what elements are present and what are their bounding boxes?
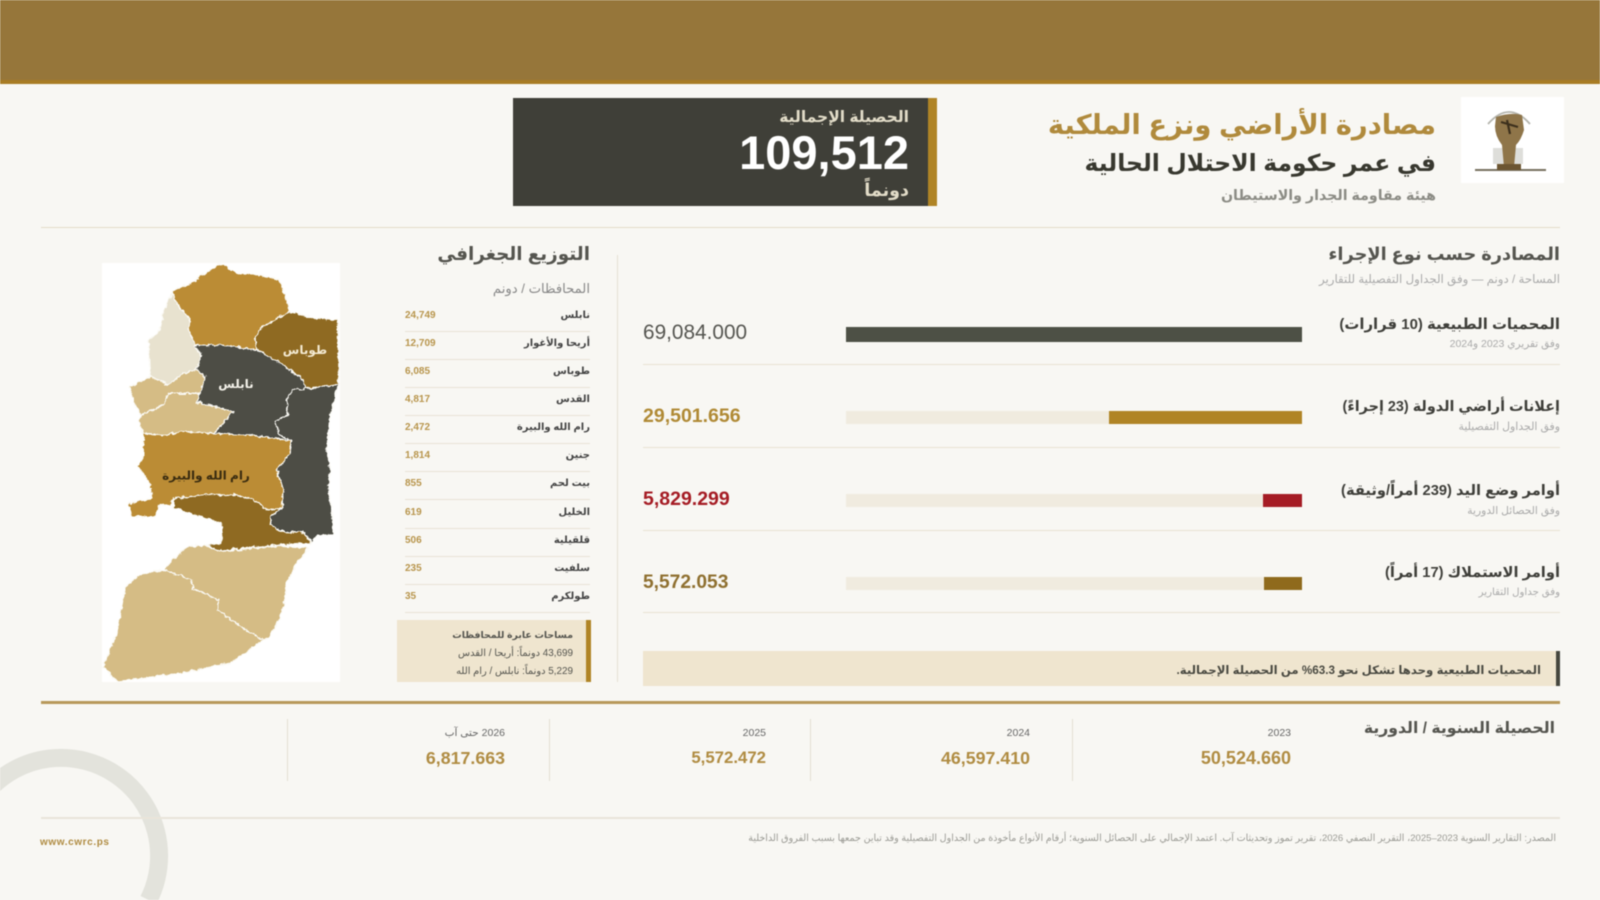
row: Salfit [404,562,590,586]
section divider [617,255,618,682]
website: www.cwrc.ps [40,837,110,848]
callout text: المحميات الطبيعية وحدها تشكل نحو 63.3% من الحصيلة الإجمالية. [1177,664,1541,677]
bar [846,411,1302,424]
logo [1461,97,1564,183]
row: Tubas: طوباس [553,366,590,377]
gold divider [41,701,1560,704]
source: وفق تقريري 2023 و2024 [1450,338,1560,350]
row: Qalqilya: 506 [405,535,422,546]
value: 29,501.656 [643,405,741,427]
callout: natural reserves share [643,651,1560,686]
organization name: هيئة مقاومة الجدار والاستيطان [1221,188,1436,204]
year 2023: 2023 [1268,727,1291,739]
region: Jerusalem [173,495,312,552]
row: Bethlehem: 855 [405,478,422,489]
row: Nablus [404,310,590,332]
row: Ramallah: رام الله والبيرة [517,422,590,433]
total value: 109,512 [739,126,909,179]
row: Nablus: نابلس [561,310,590,321]
title line 2: في عمر حكومة الاحتلال الحالية [1085,150,1436,176]
row: Tulkarm [404,590,590,614]
footer divider [41,817,1560,819]
year 2024: 46,597.410 [941,748,1030,768]
value: 5,572.053 [643,572,728,593]
callout line 1: 43,699 دونماً: أريحا / القدس [458,648,573,659]
panel: geographic distribution [437,243,590,297]
callout line 2: 5,229 دونماً: نابلس / رام الله [456,666,573,677]
row: Tubas: 6,085 [405,366,430,377]
row: Jenin: جنين [566,450,590,461]
row: Jenin: 1,814 [405,450,430,461]
heading: المصادرة حسب نوع الإجراء [1328,244,1560,264]
year 2025: 5,572.472 [691,748,766,767]
row 2 [642,396,1560,433]
region: Bethlehem [163,545,308,640]
row: Hebron: الخليل [559,507,590,518]
bar [846,494,1302,507]
map background [102,263,340,682]
top band [0,0,1600,84]
row: Ramallah [404,422,590,444]
region: Tubas [255,312,338,388]
row: Ramallah: 2,472 [405,422,430,433]
region: Nablus [195,345,306,441]
title line 1: مصادرة الأراضي ونزع الملكية [1048,109,1436,140]
row: Jericho [405,335,590,360]
row: Tulkarm: طولكرم [551,591,590,602]
bar [846,577,1302,590]
region: Ramallah [128,432,292,517]
decorative ring [0,748,168,900]
map label: Nablus: نابلس [218,377,254,391]
callout heading: مساحات عابرة للمحافظات [452,629,573,640]
row: Jericho: أريحا والأغوار [524,338,590,349]
region: Jordan Valley [270,385,338,543]
callout: cross-governorate areas [397,620,591,682]
row: Bethlehem [404,478,590,500]
row: Tubas [404,366,590,388]
year 2026: 2026 حتى آب [445,727,505,739]
region: Hebron [103,569,263,682]
annual heading: الحصيلة السنوية / الدورية [1364,720,1555,737]
map of West Bank [103,264,340,682]
map label: Ramallah: رام الله والبيرة [162,468,250,483]
total panel [513,98,937,206]
row: Qalqilya: قلقيلية [554,535,590,546]
label: أوامر وضع اليد (239 أمراً/وثيقة) [1341,483,1560,499]
row: Salfit: سلفيت [554,563,590,574]
label: المحميات الطبيعية (10 قرارات) [1339,317,1560,333]
map label: Tubas: طوباس [283,343,327,358]
year 2024: 2024 [1007,727,1030,739]
subheading: المساحة / دونم — وفق الجداول التفصيلية للتقارير [1319,272,1560,286]
row 1 [643,316,1560,350]
source: وفق الحصائل الدورية [1467,505,1560,517]
source: وفق الجداول التفصيلية [1458,421,1560,433]
heading: التوزيع الجغرافي [437,243,590,264]
region: Salfit [138,393,233,435]
row: Salfit: 235 [405,563,422,574]
header divider [41,227,1560,228]
year 2026 [426,726,506,768]
region: Qalqilya [129,369,205,415]
value: 69,084.000 [643,321,747,344]
row: Jerusalem: 4,817 [405,394,430,405]
row: Nablus: 24,749 [405,310,436,321]
row 4 [643,561,1560,598]
panel: confiscation by action type [1318,244,1560,286]
row: Qalqilya [404,534,590,558]
row: Bethlehem: بيت لحم [550,478,590,489]
label: إعلانات أراضي الدولة (23 إجراءً) [1343,399,1560,415]
row: Hebron: 619 [405,507,422,518]
source: وفق جداول التقارير [1479,587,1560,598]
governorate list [404,310,590,614]
region: Tulkarm [148,293,202,385]
source note: المصدر: التقارير السنوية 2023–2025، التقرير النصفي 2026، تقرير تموز وتحديثات آب. اعتمد الإجمالي على الحصائل السنوية؛ أرقام الأنواع مأخوذة من الجداول التفصيلية وقد تباين جمعها بسبب الفروق الداخلية [748,833,1556,844]
total unit: دونماً [864,180,909,200]
label: أوامر الاستملاك (17 أمراً) [1385,565,1560,581]
total label: الحصيلة الإجمالية [779,109,909,126]
year 2026: 6,817.663 [426,748,505,768]
year 2023 [1200,727,1292,768]
subheading: المحافظات / دونم [493,281,590,296]
year 2025: 2025 [743,727,766,739]
region: Jenin [172,263,290,350]
bar [846,327,1302,342]
row: Jerusalem [404,394,590,416]
value: 5,829.299 [643,488,730,510]
year 2023: 50,524.660 [1201,748,1291,768]
row: Jericho: 12,709 [405,338,436,349]
row: Tulkarm: 35 [405,591,416,602]
row 3 [643,479,1560,517]
year 2025 [691,727,766,767]
row: Jenin [405,450,590,472]
row: Jerusalem: القدس [556,394,590,405]
row: Hebron [404,506,590,530]
title [1048,107,1436,204]
panel: annual totals [426,720,1555,768]
year 2024 [940,727,1030,768]
